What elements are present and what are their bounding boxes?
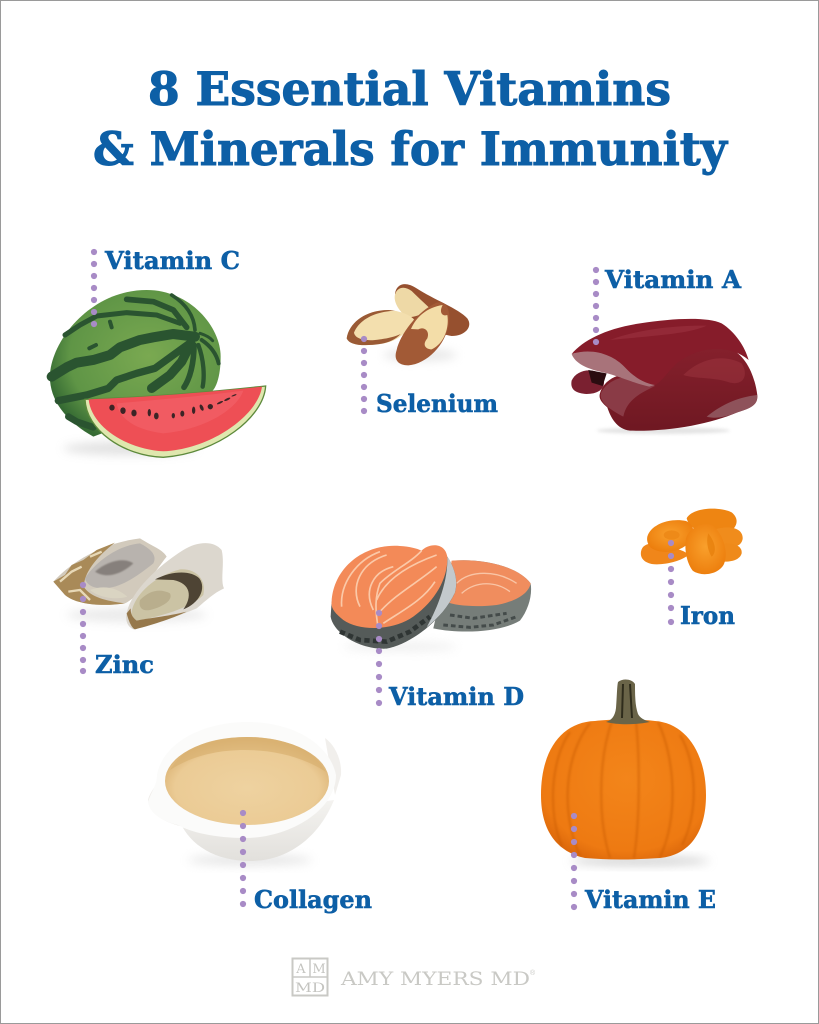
dotted leader — [593, 267, 599, 345]
dotted leader — [571, 813, 577, 910]
logo wordmark: AMY MYERS MD — [340, 968, 530, 990]
icon: brazil nuts — [347, 284, 469, 365]
item: Selenium brazil nuts — [347, 284, 498, 418]
icon: dried apricots — [641, 509, 743, 574]
label: Vitamin A — [604, 265, 741, 294]
logo mark: MD — [295, 981, 325, 996]
label: Vitamin C — [104, 246, 240, 275]
item: Vitamin D salmon — [331, 545, 531, 711]
label: Zinc — [95, 650, 154, 679]
title: & Minerals for Immunity — [93, 122, 728, 176]
dotted leader — [240, 810, 246, 907]
icon: salmon steaks — [331, 545, 531, 651]
logo mark: A — [295, 962, 306, 977]
dotted leader — [91, 249, 97, 327]
label: Vitamin D — [388, 682, 524, 711]
label: Collagen — [254, 885, 372, 914]
item: Zinc oysters — [53, 538, 224, 679]
item: Vitamin A liver — [571, 265, 757, 434]
item: Vitamin C watermelon — [50, 246, 266, 457]
icon: liver — [571, 319, 757, 434]
title — [93, 62, 728, 176]
icon: bowl of bone broth — [148, 722, 341, 865]
item: Collagen bone broth — [148, 722, 372, 914]
label: Selenium — [376, 389, 498, 418]
logo mark: M — [312, 962, 326, 977]
label: Iron — [680, 601, 735, 630]
registered mark: ® — [530, 969, 536, 977]
item: Iron dried apricots — [641, 509, 743, 630]
title: 8 Essential Vitamins — [148, 62, 671, 116]
dotted leader — [80, 582, 86, 674]
dotted leader — [668, 540, 674, 625]
label: Vitamin E — [584, 885, 716, 914]
logo mark — [292, 958, 328, 996]
icon: watermelon — [50, 290, 266, 457]
dotted leader — [376, 610, 382, 706]
dotted leader — [361, 336, 367, 414]
icon: pumpkin — [541, 680, 710, 865]
item: Vitamin E pumpkin — [541, 680, 716, 914]
icon: oysters — [53, 538, 224, 629]
logo: Amy Myers MD — [292, 958, 536, 996]
